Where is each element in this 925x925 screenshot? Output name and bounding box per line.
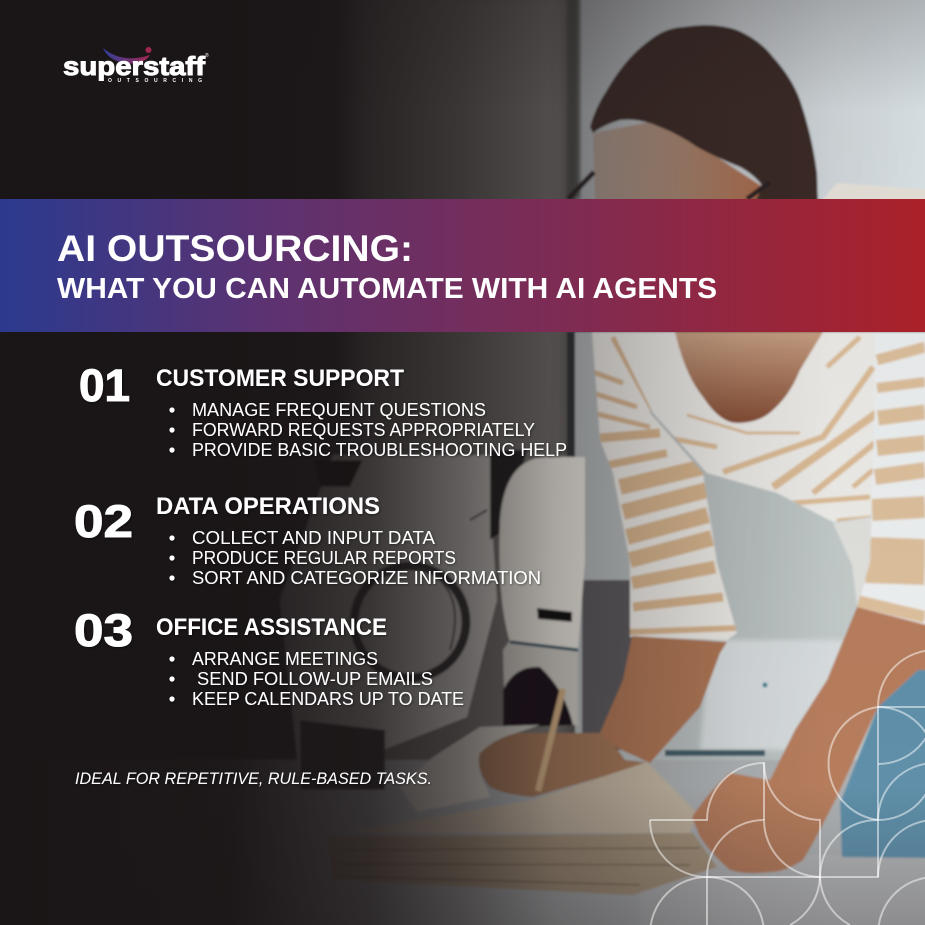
woman shirt: left sleeve (592, 332, 737, 640)
background photo: woman and robot working at a desk (258, 0, 925, 925)
shirt waist (833, 517, 872, 605)
glasses (568, 172, 770, 199)
papers (327, 833, 717, 895)
logo: superstaff outsourcing (63, 47, 209, 84)
head: face (593, 120, 763, 205)
section 03: office assistance: KEEP CALENDARS UP TO DATE (192, 688, 464, 709)
decorative line pattern (650, 650, 925, 925)
title (57, 228, 717, 305)
logo: superstaff outsourcing: ® (205, 52, 209, 59)
section 02: data operations: PRODUCE REGULAR REPORTS (192, 547, 456, 568)
section 03: office assistance: OFFICE ASSISTANCE (156, 614, 387, 641)
left arm (595, 636, 727, 763)
desk (0, 760, 925, 925)
pencil (535, 688, 566, 792)
closing note: IDEAL FOR REPETITIVE, RULE-BASED TASKS. (75, 769, 432, 788)
section 03: office assistance: SEND FOLLOW-UP EMAILS (197, 668, 433, 689)
logo: superstaff outsourcing: superstaff (63, 51, 205, 81)
section 02: data operations: 02 (74, 496, 133, 547)
jeans (840, 670, 925, 858)
section 02: data operations: SORT AND CATEGORIZE INFORMATION (192, 567, 541, 588)
neckline (675, 332, 823, 423)
section 01: customer support: PROVIDE BASIC TROUBLESHOOTING HELP (192, 439, 567, 460)
section 01: customer support: CUSTOMER SUPPORT (156, 365, 404, 392)
section 01: customer support: MANAGE FREQUENT QUESTIONS (192, 399, 486, 420)
title: WHAT YOU CAN AUTOMATE WITH AI AGENTS (57, 273, 717, 305)
robot body (280, 450, 585, 812)
title banner (0, 199, 925, 332)
office equipment on desk (700, 640, 850, 750)
woman shirt: torso (613, 332, 880, 522)
section 03: office assistance (74, 605, 464, 709)
section 01: customer support (79, 360, 567, 460)
section 03: office assistance: ARRANGE MEETINGS (192, 648, 378, 669)
right arm and hand (692, 607, 925, 873)
woman shirt: right sleeve (857, 332, 925, 627)
section 01: customer support: FORWARD REQUESTS APPROPRIATELY (192, 419, 535, 440)
section 01: customer support: 01 (79, 360, 130, 411)
writing hand (479, 733, 650, 797)
logo: superstaff outsourcing: OUTSOURCING (108, 78, 202, 84)
head: hair (590, 25, 818, 205)
robot hand (400, 725, 540, 812)
section 02: data operations (74, 493, 541, 588)
section 03: office assistance: 03 (74, 605, 133, 656)
section 02: data operations: COLLECT AND INPUT DATA (192, 527, 436, 548)
title: AI OUTSOURCING: (57, 228, 413, 269)
shirt back (818, 183, 925, 205)
section 02: data operations: DATA OPERATIONS (156, 493, 380, 520)
